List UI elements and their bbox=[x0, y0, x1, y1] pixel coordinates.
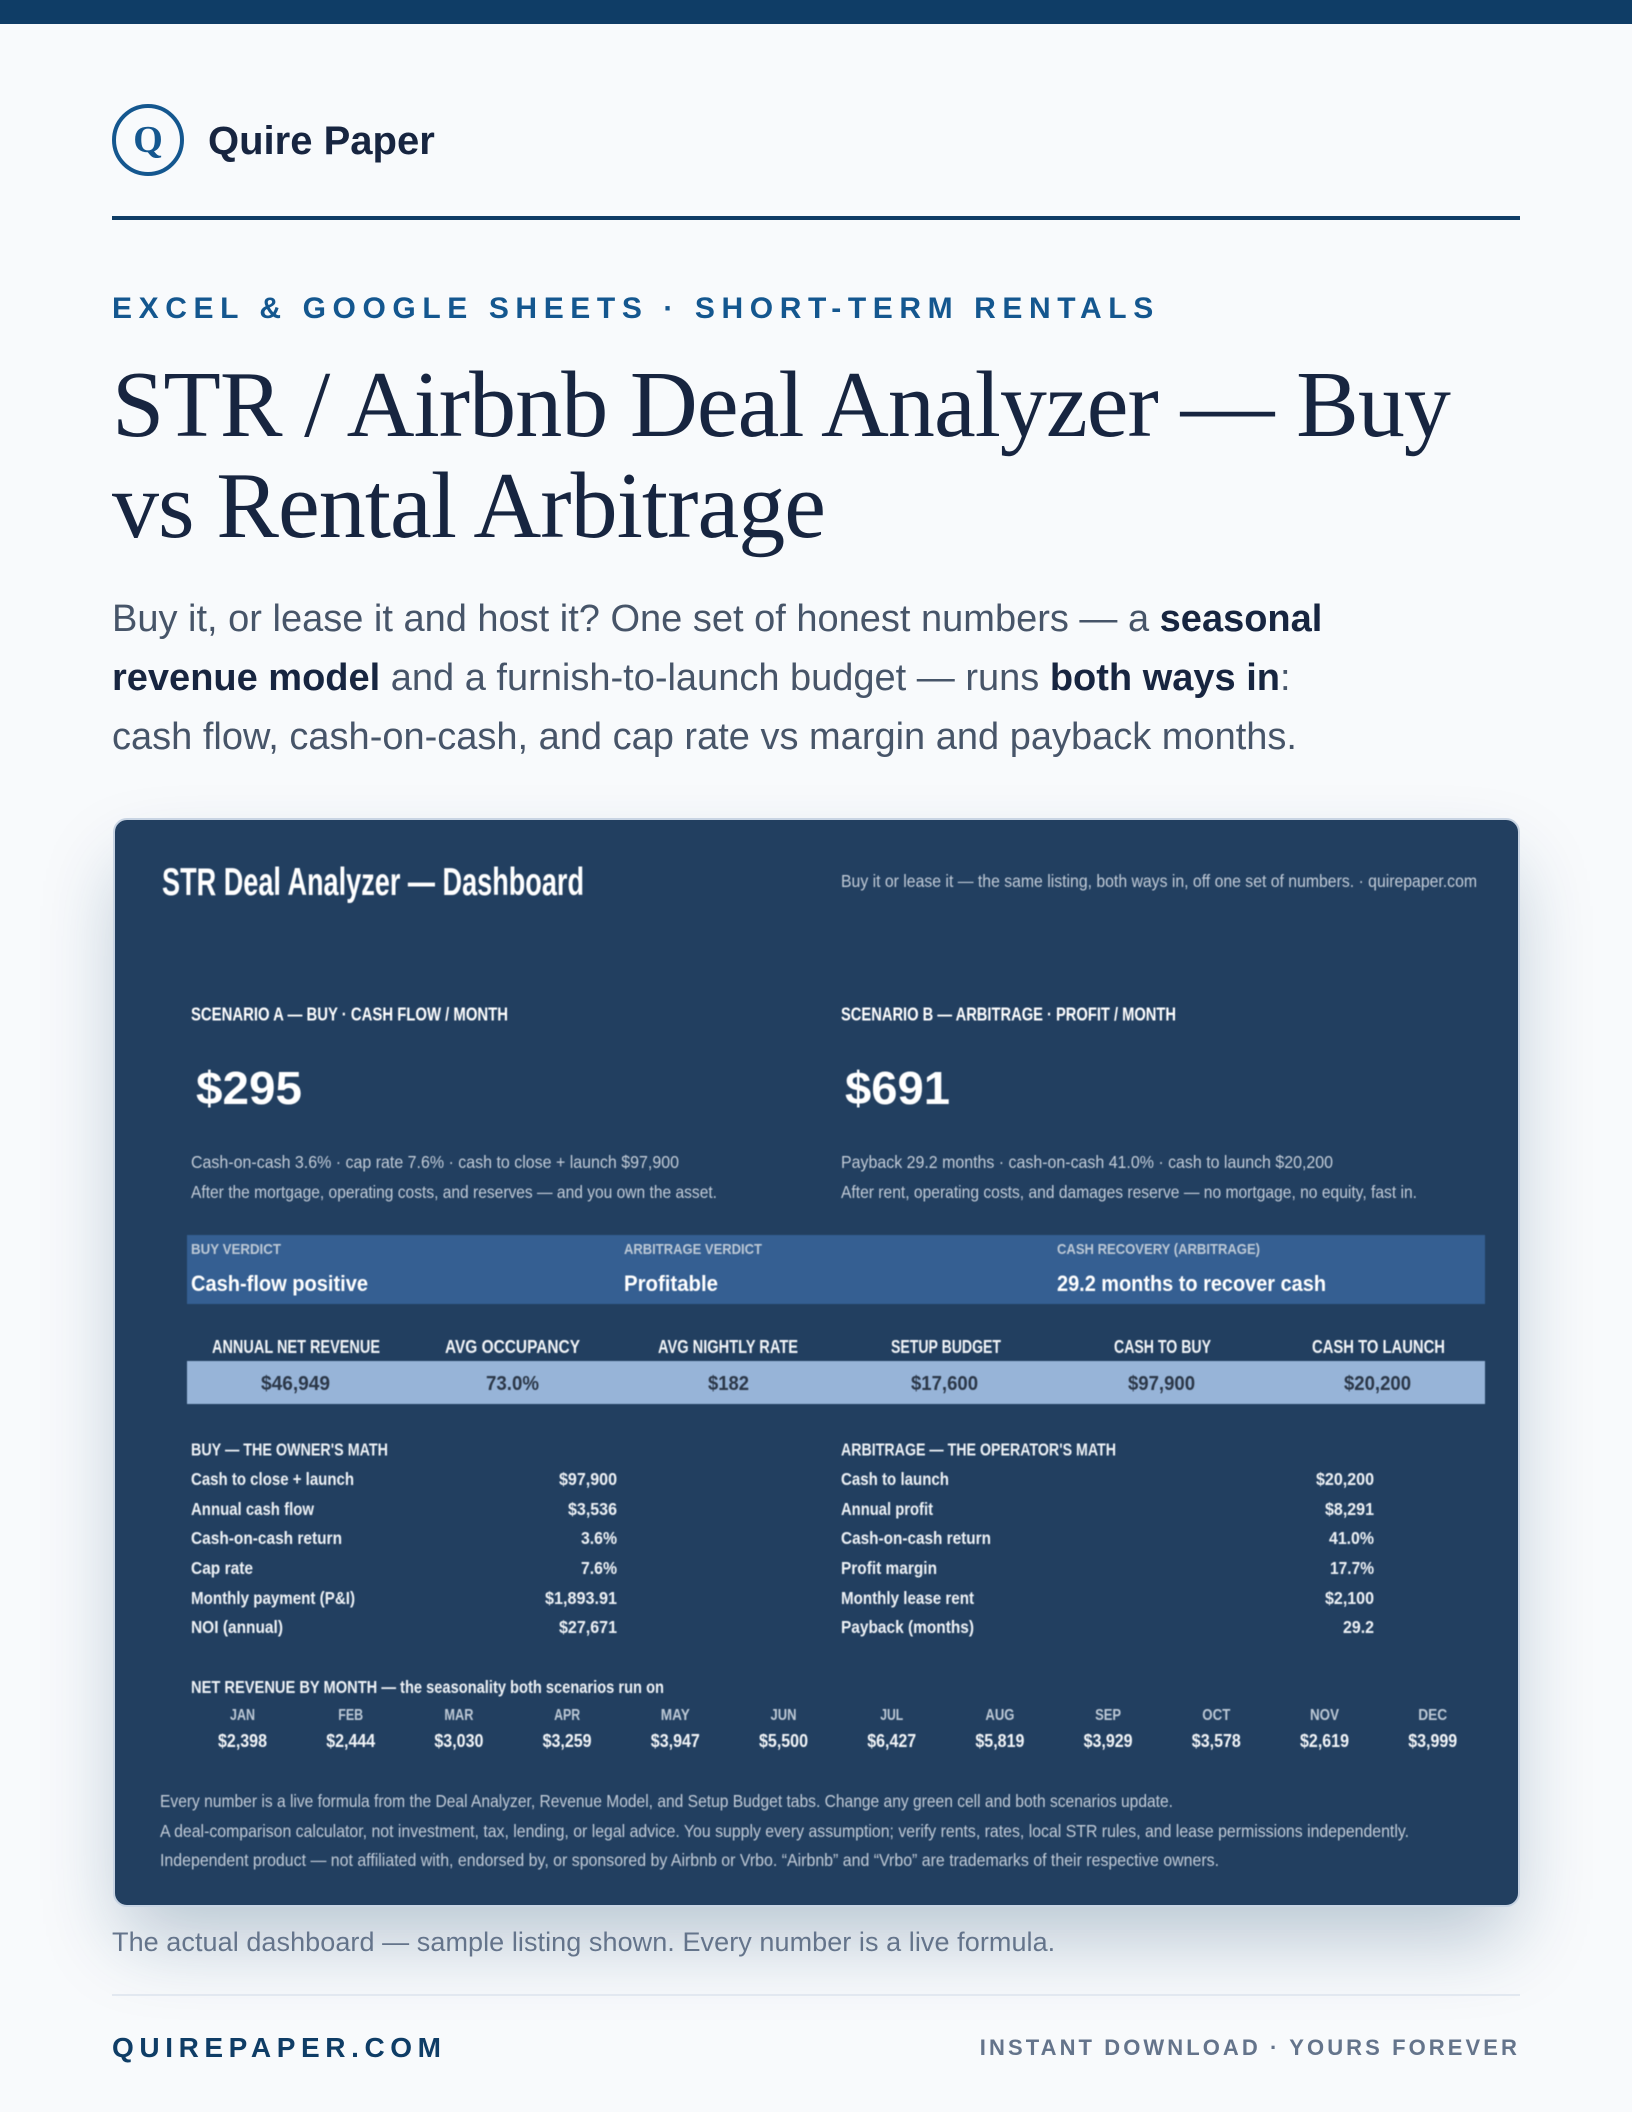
KPI strip: AVG NIGHTLY RATE bbox=[658, 1337, 798, 1357]
scenario A: buy: $295 bbox=[196, 1062, 302, 1114]
table: arbitrage math: Payback (months) bbox=[841, 1617, 974, 1637]
top bar bbox=[0, 0, 1632, 24]
chart table: net revenue by month: $2,619 bbox=[1300, 1731, 1349, 1751]
table: arbitrage math: 29.2 bbox=[1343, 1617, 1374, 1637]
chart table: net revenue by month: $5,819 bbox=[975, 1731, 1024, 1751]
table: arbitrage math: 17.7% bbox=[1330, 1558, 1374, 1578]
verdict band: ARBITRAGE VERDICT bbox=[624, 1241, 762, 1258]
chart table: net revenue by month: JAN bbox=[230, 1707, 255, 1724]
title bbox=[112, 352, 1450, 558]
chart table: net revenue by month: $6,427 bbox=[867, 1731, 916, 1751]
chart table: net revenue by month: JUN bbox=[770, 1707, 796, 1724]
chart table: net revenue by month: DEC bbox=[1418, 1707, 1447, 1724]
KPI strip: $97,900 bbox=[1128, 1373, 1195, 1395]
chart table: net revenue by month: $2,398 bbox=[218, 1731, 267, 1751]
intro text: revenue model and a furnish-to-launch budget — runs both ways in: bbox=[112, 657, 1291, 699]
table: buy math: BUY — THE OWNER'S MATH bbox=[191, 1440, 388, 1460]
table: buy math: $1,893.91 bbox=[545, 1588, 617, 1608]
chart table: net revenue by month: $3,578 bbox=[1192, 1731, 1241, 1751]
scenario B: arbitrage: $691 bbox=[845, 1062, 950, 1114]
chart table: net revenue by month: FEB bbox=[338, 1707, 363, 1724]
chart table: net revenue by month: $3,947 bbox=[651, 1731, 700, 1751]
dashboard footnotes: Every number is a live formula from the Deal Analyzer, Revenue Model, and Setup Budget tabs. Change any green cell and both scenarios update. bbox=[160, 1791, 1173, 1811]
chart table: net revenue by month: NOV bbox=[1310, 1707, 1340, 1724]
chart table: net revenue by month: $3,030 bbox=[434, 1731, 483, 1751]
verdict band: Profitable bbox=[624, 1271, 718, 1296]
table: buy math: $97,900 bbox=[559, 1469, 617, 1489]
chart table: net revenue by month bbox=[191, 1677, 1457, 1751]
table: arbitrage math bbox=[841, 1440, 1374, 1637]
panel: dashboard screenshot bbox=[113, 818, 1520, 1907]
chart table: net revenue by month: $2,444 bbox=[326, 1731, 375, 1751]
KPI strip: ANNUAL NET REVENUE bbox=[212, 1337, 380, 1357]
chart table: net revenue by month: NET REVENUE BY MONTH — the seasonality both scenarios run on bbox=[191, 1677, 664, 1697]
KPI strip: CASH TO BUY bbox=[1114, 1337, 1211, 1357]
table: buy math: Cash to close + launch bbox=[191, 1469, 354, 1489]
verdict band: CASH RECOVERY (ARBITRAGE) bbox=[1057, 1241, 1260, 1258]
table: arbitrage math: Annual profit bbox=[841, 1499, 933, 1519]
KPI strip: $20,200 bbox=[1344, 1373, 1411, 1395]
table: buy math: 3.6% bbox=[581, 1528, 617, 1548]
table: buy math: $27,671 bbox=[559, 1617, 617, 1637]
chart table: net revenue by month: JUL bbox=[880, 1707, 903, 1724]
table: buy math: $3,536 bbox=[568, 1499, 617, 1519]
scenario A: buy: Cash-on-cash 3.6% · cap rate 7.6% · cash to close + launch $97,900 bbox=[191, 1152, 679, 1172]
dashboard footnotes: A deal-comparison calculator, not investment, tax, lending, or legal advice. You supply every assumption; verify rents, rates, local STR rules, and lease permissions independently. bbox=[160, 1821, 1409, 1841]
KPI strip: $17,600 bbox=[911, 1373, 978, 1395]
dashboard heading bbox=[162, 861, 1477, 904]
KPI strip: 73.0% bbox=[486, 1373, 539, 1395]
icon: Q logo bbox=[112, 104, 184, 176]
KPI strip bbox=[187, 1337, 1485, 1404]
table: arbitrage math: $8,291 bbox=[1325, 1499, 1374, 1519]
table: buy math: Cash-on-cash return bbox=[191, 1528, 342, 1548]
scenario B: arbitrage: After rent, operating costs, and damages reserve — no mortgage, no equity, fast in. bbox=[841, 1182, 1417, 1202]
dashboard footnotes: Independent product — not affiliated with, endorsed by, or sponsored by Airbnb or Vrbo. “Airbnb” and “Vrbo” are trademarks of their respective owners. bbox=[160, 1850, 1219, 1870]
chart table: net revenue by month: APR bbox=[554, 1707, 580, 1724]
table: arbitrage math: 41.0% bbox=[1329, 1528, 1374, 1548]
table: buy math: Monthly payment (P&I) bbox=[191, 1588, 355, 1608]
intro text: Buy it, or lease it and host it? One set of honest numbers — a seasonal bbox=[112, 598, 1322, 640]
table: arbitrage math: Monthly lease rent bbox=[841, 1588, 974, 1608]
table: arbitrage math: Profit margin bbox=[841, 1558, 937, 1578]
KPI strip: $182 bbox=[708, 1373, 749, 1395]
scenario A: buy: SCENARIO A — BUY · CASH FLOW / MONTH bbox=[191, 1004, 508, 1024]
table: arbitrage math: $20,200 bbox=[1316, 1469, 1374, 1489]
scenario A: buy: After the mortgage, operating costs, and reserves — and you own the asset. bbox=[191, 1182, 717, 1202]
table: buy math: 7.6% bbox=[581, 1558, 617, 1578]
verdict band bbox=[187, 1235, 1485, 1304]
title: vs Rental Arbitrage bbox=[112, 454, 825, 558]
table: arbitrage math: Cash to launch bbox=[841, 1469, 949, 1489]
chart table: net revenue by month: OCT bbox=[1202, 1707, 1231, 1724]
scenario B: arbitrage bbox=[841, 1004, 1417, 1202]
brand header bbox=[112, 104, 435, 176]
icon: Q logo: Q bbox=[133, 119, 163, 161]
chart table: net revenue by month: MAR bbox=[444, 1707, 473, 1724]
verdict band: 29.2 months to recover cash bbox=[1057, 1271, 1326, 1296]
footer: site name: QUIREPAPER.COM bbox=[112, 2032, 447, 2063]
scenario A: buy bbox=[191, 1004, 717, 1202]
chart table: net revenue by month: MAY bbox=[661, 1707, 690, 1724]
table: arbitrage math: Cash-on-cash return bbox=[841, 1528, 991, 1548]
intro text bbox=[112, 598, 1322, 758]
verdict band: Cash-flow positive bbox=[191, 1271, 368, 1296]
intro text: cash flow, cash-on-cash, and cap rate vs margin and payback months. bbox=[112, 716, 1297, 758]
table: arbitrage math: $2,100 bbox=[1325, 1588, 1374, 1608]
chart table: net revenue by month: $3,259 bbox=[543, 1731, 592, 1751]
table: buy math: NOI (annual) bbox=[191, 1617, 283, 1637]
chart table: net revenue by month: AUG bbox=[985, 1707, 1014, 1724]
caption: The actual dashboard — sample listing shown. Every number is a live formula. bbox=[112, 1927, 1055, 1957]
chart table: net revenue by month: $3,999 bbox=[1408, 1731, 1457, 1751]
KPI strip: $46,949 bbox=[261, 1373, 330, 1395]
title: STR / Airbnb Deal Analyzer — Buy bbox=[112, 352, 1450, 456]
chart table: net revenue by month: SEP bbox=[1095, 1707, 1121, 1724]
KPI strip: SETUP BUDGET bbox=[891, 1337, 1001, 1357]
KPI strip: CASH TO LAUNCH bbox=[1312, 1337, 1445, 1357]
chart table: net revenue by month: $3,929 bbox=[1084, 1731, 1133, 1751]
eyebrow: EXCEL & GOOGLE SHEETS · SHORT-TERM RENTALS bbox=[112, 292, 1160, 325]
table: buy math: Cap rate bbox=[191, 1558, 253, 1578]
scenario B: arbitrage: SCENARIO B — ARBITRAGE · PROFIT / MONTH bbox=[841, 1004, 1176, 1024]
dashboard footnotes bbox=[160, 1791, 1409, 1870]
verdict band: BUY VERDICT bbox=[191, 1241, 281, 1258]
footer: tagline: INSTANT DOWNLOAD · YOURS FOREVER bbox=[980, 2035, 1520, 2060]
table: buy math bbox=[191, 1440, 617, 1637]
table: arbitrage math: ARBITRAGE — THE OPERATOR'S MATH bbox=[841, 1440, 1116, 1460]
scenario B: arbitrage: Payback 29.2 months · cash-on-cash 41.0% · cash to launch $20,200 bbox=[841, 1152, 1333, 1172]
table: buy math: Annual cash flow bbox=[191, 1499, 314, 1519]
KPI strip: AVG OCCUPANCY bbox=[445, 1337, 580, 1357]
dashboard heading: STR Deal Analyzer — Dashboard bbox=[162, 861, 584, 904]
brand name: Quire Paper bbox=[208, 118, 435, 162]
chart table: net revenue by month: $5,500 bbox=[759, 1731, 808, 1751]
